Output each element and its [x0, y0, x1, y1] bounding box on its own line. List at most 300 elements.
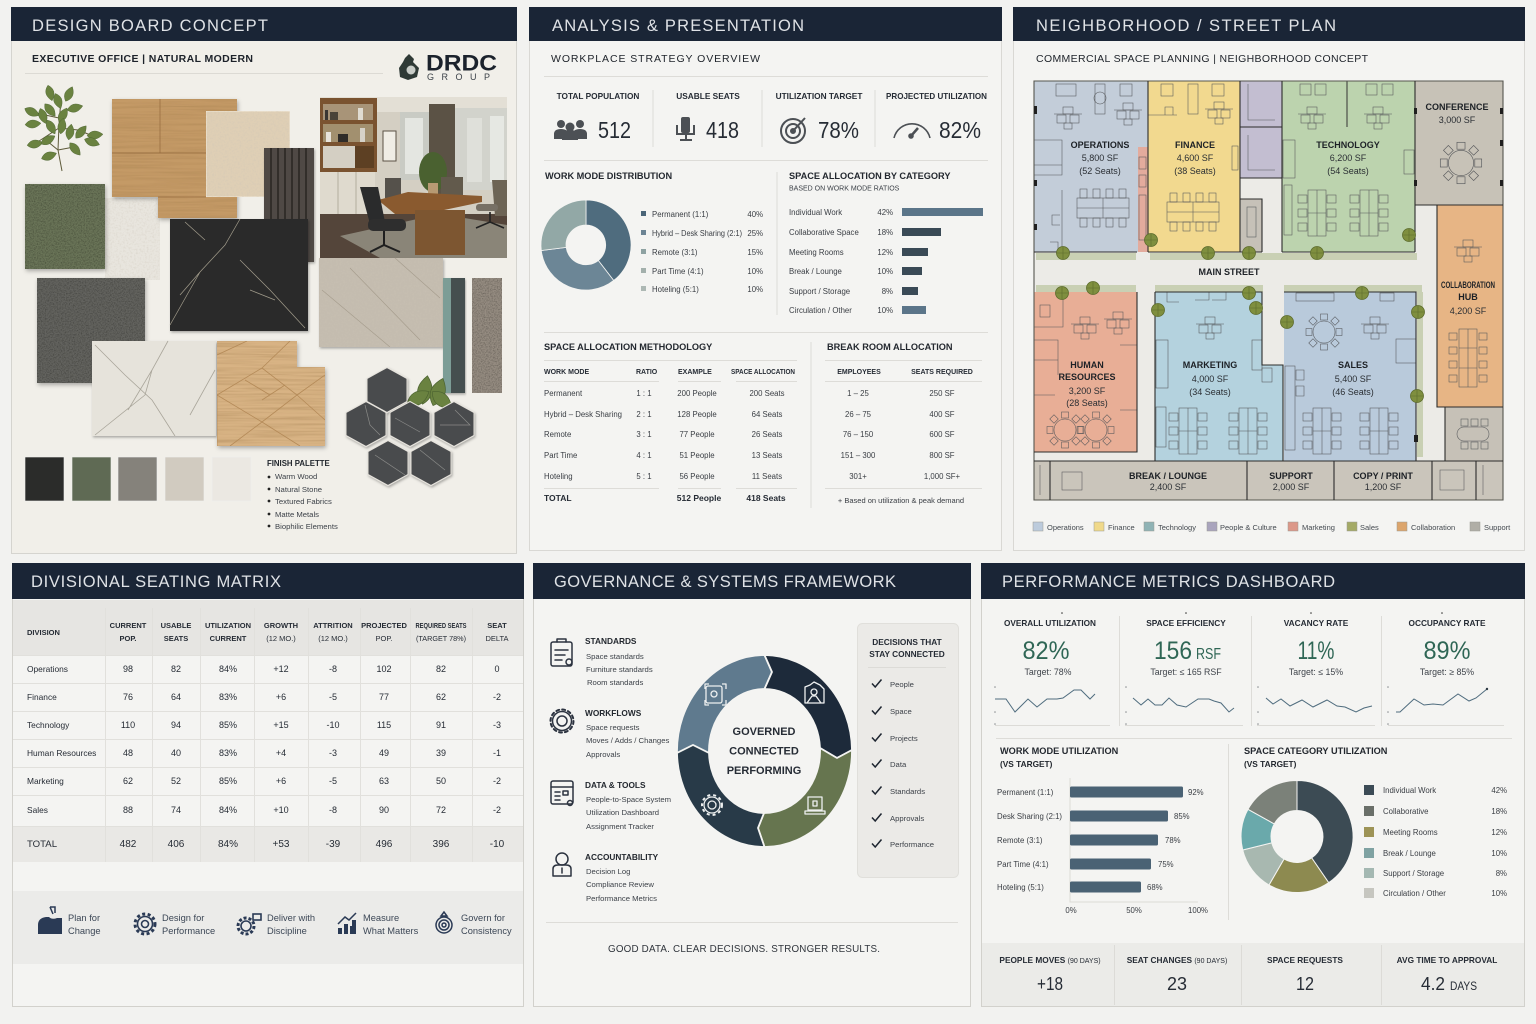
table: space allocation methodology: 77 People [679, 430, 715, 439]
checklist items: Standards [890, 787, 925, 796]
bar chart: space allocation: Collaborative Space [789, 228, 859, 237]
table rows: +12 [273, 664, 289, 674]
heading: work mode utilization [1000, 746, 1119, 769]
bar chart: work mode utilization: Hoteling (5:1) [997, 883, 1044, 892]
table rows: +6 [276, 692, 286, 702]
service band: 1,200 SF [1365, 482, 1402, 492]
metric: avg time to approval [1397, 955, 1497, 994]
center label: PERFORMING [727, 765, 801, 777]
metric: space requests: SPACE REQUESTS [1267, 955, 1343, 965]
table header [27, 621, 509, 643]
table header: CURRENT [210, 634, 247, 643]
room: human resources [1034, 292, 1137, 452]
principle: plan for change: Plan for [68, 913, 100, 923]
table header: ATTRITION [313, 621, 353, 630]
table rows: 83% [219, 692, 237, 702]
material: black marble [170, 219, 308, 331]
table rows: 0 [494, 664, 500, 674]
table: space allocation methodology: SPACE ALLOCATION METHODOLOGY [544, 342, 712, 352]
sparkline [1257, 686, 1375, 726]
pillar: accountability: ACCOUNTABILITY [585, 852, 659, 862]
principle: deliver with discipline: Deliver with [267, 913, 315, 923]
table rows: -1 [493, 748, 501, 758]
totals row: +53 [273, 839, 290, 850]
principle: plan for change [68, 913, 101, 936]
pillar: data and tools: DATA & TOOLS [585, 780, 646, 790]
table: space allocation methodology [544, 342, 797, 503]
room: human resources: RESOURCES [1058, 372, 1116, 382]
sparkline [1125, 686, 1243, 726]
table: space allocation methodology: 56 People [679, 472, 715, 481]
service band: COPY / PRINT [1353, 471, 1413, 481]
legend: space category: 18% [1491, 807, 1507, 816]
principles strip [13, 891, 523, 964]
table: space allocation methodology: 128 People [677, 410, 717, 419]
center label [727, 726, 801, 777]
pillar: data and tools: People-to-Space System [586, 795, 671, 804]
checklist items [872, 680, 934, 849]
KPI: projected utilization: PROJECTED UTILIZATION [886, 91, 987, 101]
table rows: Marketing [27, 776, 64, 786]
KPI: vacancy rate: VACANCY RATE [1284, 618, 1349, 628]
panel title: NEIGHBORHOOD / STREET PLAN [1036, 17, 1336, 35]
material: oak panel [112, 99, 237, 218]
table rows: -10 [326, 720, 340, 730]
checklist panel [858, 624, 958, 878]
room: human resources: HUMAN [1070, 360, 1104, 370]
legend: space category [1364, 785, 1507, 898]
service band: 2,000 SF [1273, 482, 1310, 492]
logo: DRDC [426, 50, 497, 76]
bar chart: work mode utilization: Remote (3:1) [997, 836, 1043, 845]
room: sales [1284, 292, 1416, 461]
room: collaboration hub [1437, 205, 1503, 407]
checklist items: Performance [890, 840, 934, 849]
totals row: 482 [120, 839, 137, 850]
principle: design for performance: Performance [162, 926, 215, 936]
header bar [529, 7, 1002, 41]
KPI: utilization target [776, 91, 862, 143]
panel: performance metrics dashboard [981, 563, 1525, 1006]
pillar: standards: STANDARDS [585, 636, 637, 646]
icon: bar chart trend [338, 913, 356, 934]
table rows: 110 [121, 720, 135, 730]
heading: work mode utilization: (VS TARGET) [1000, 759, 1053, 769]
table rows: Technology [27, 720, 70, 730]
legend: departments: Technology [1158, 523, 1196, 532]
service band [1034, 461, 1503, 500]
room: people and culture [1240, 81, 1282, 252]
checklist items: Approvals [890, 814, 924, 823]
KPI: space efficiency: 156 [1154, 637, 1192, 665]
principle: deliver with discipline [267, 913, 315, 936]
legend: work mode: Hoteling (5:1) [652, 285, 699, 294]
checklist panel: STAY CONNECTED [869, 649, 945, 659]
table rows: 85% [219, 776, 237, 786]
heading: space category utilization: (VS TARGET) [1244, 759, 1297, 769]
table rows: 83% [219, 748, 237, 758]
table rows: 72 [436, 805, 446, 815]
table: space allocation methodology: 13 Seats [752, 451, 782, 460]
bar chart: space allocation [789, 208, 983, 315]
pillar: workflows [550, 708, 669, 759]
icon: laptop [805, 797, 825, 814]
header bar [533, 563, 971, 599]
legend: departments [1033, 522, 1511, 532]
room: operations: 5,800 SF [1082, 153, 1119, 163]
principle: govern for consistency: Govern for [461, 913, 505, 923]
donut chart: space category [1241, 780, 1353, 893]
heading: work mode distribution: WORK MODE DISTRIBUTION [545, 171, 672, 181]
table: space allocation methodology: 1 : 1 [636, 389, 652, 398]
room: conference: CONFERENCE [1425, 102, 1489, 112]
pillar: accountability: Compliance Review [586, 880, 654, 889]
material: plant behind hex tiles [404, 375, 456, 413]
KPI: usable seats: 418 [706, 117, 739, 143]
KPI: space efficiency [1125, 612, 1243, 726]
donut chart: work mode [541, 200, 631, 290]
sparkline [1387, 686, 1504, 726]
material: dark wood slats [264, 148, 314, 262]
totals row: 496 [376, 839, 393, 850]
room: operations: OPERATIONS [1071, 140, 1129, 150]
table rows: 48 [123, 748, 133, 758]
legend: work mode: Remote (3:1) [652, 248, 698, 257]
bar chart: work mode utilization: Permanent (1:1) [997, 788, 1054, 797]
heading: space category utilization [1244, 746, 1388, 769]
center label: CONNECTED [729, 746, 799, 758]
table header: DELTA [485, 634, 509, 643]
room: collaboration hub: HUB [1458, 292, 1478, 302]
legend: space category: Support / Storage [1383, 869, 1444, 878]
table rows: 77 [379, 692, 389, 702]
table rows: 84% [219, 664, 237, 674]
KPI: overall utilization [994, 612, 1110, 726]
logo [399, 50, 497, 82]
table rows: 98 [123, 664, 133, 674]
pillar: accountability: Decision Log [586, 867, 630, 876]
table header: PROJECTED [361, 621, 408, 630]
heading: space allocation by category: BASED ON WORK MODE RATIOS [789, 186, 900, 192]
totals row: -39 [326, 839, 341, 850]
table rows: -5 [329, 776, 337, 786]
table header: CURRENT [110, 621, 147, 630]
header bar [12, 563, 524, 599]
principle: design for performance: Design for [162, 913, 204, 923]
table: space allocation methodology: 51 People [679, 451, 715, 460]
metric: avg time to approval: 4.2 [1421, 973, 1445, 994]
table: space allocation methodology: Permanent [544, 389, 583, 398]
room: technology: (54 Seats) [1327, 166, 1369, 176]
subtitle: COMMERCIAL SPACE PLANNING | NEIGHBORHOOD CONCEPT [1036, 53, 1369, 65]
finish palette swatches [25, 457, 251, 501]
metric: seat changes [1127, 955, 1227, 994]
metric: seat changes: SEAT CHANGES (90 DAYS) [1127, 955, 1227, 965]
bar chart: work mode utilization: 75% [1158, 860, 1174, 869]
room: sales: 5,400 SF [1335, 374, 1372, 384]
room: technology [1282, 81, 1415, 252]
KPI: utilization target: 78% [818, 117, 859, 143]
table rows: 62 [436, 692, 446, 702]
table rows: 40 [171, 748, 181, 758]
heading: space category utilization: SPACE CATEGORY UTILIZATION [1244, 746, 1388, 756]
footer metrics band [982, 943, 1524, 1006]
table rows: 49 [379, 748, 389, 758]
panel title: DESIGN BOARD CONCEPT [32, 17, 268, 35]
table: break room allocation: + Based on utilization & peak demand [838, 496, 964, 505]
subtitle: EXECUTIVE OFFICE | NATURAL MODERN [32, 53, 253, 65]
heading: space allocation by category [789, 171, 950, 192]
cycle diagram [677, 655, 852, 847]
table header: POP. [120, 634, 136, 643]
room: operations [1034, 81, 1148, 252]
room: marketing: (34 Seats) [1189, 387, 1231, 397]
table rows: 82 [436, 664, 446, 674]
bar chart: work mode utilization: Part Time (4:1) [997, 860, 1049, 869]
table: space allocation methodology: TOTAL [544, 493, 572, 503]
bar chart: space allocation: 10% [877, 267, 893, 276]
legend: space category: 10% [1491, 849, 1507, 858]
legend: work mode: 25% [747, 229, 763, 238]
segment: data [758, 748, 852, 847]
bar chart: work mode utilization: 0% [1065, 906, 1077, 915]
legend: work mode: 15% [747, 248, 763, 257]
table: space allocation methodology: 512 People [677, 493, 721, 503]
material: hexagonal stone tiles [346, 368, 474, 486]
KPI: occupancy rate: OCCUPANCY RATE [1409, 618, 1486, 628]
table header: POP. [376, 634, 392, 643]
icon: plan for change [38, 907, 62, 934]
totals row [27, 839, 505, 850]
table: space allocation methodology: 3 : 1 [636, 430, 652, 439]
table header: (12 MO.) [318, 634, 348, 643]
table: space allocation methodology: 2 : 1 [636, 410, 652, 419]
floor plan [1034, 81, 1503, 500]
room: finance: (38 Seats) [1174, 166, 1216, 176]
pillar: standards: Space standards [586, 652, 644, 661]
bar chart: space allocation: 42% [877, 208, 893, 217]
principle: measure what matters: What Matters [363, 926, 419, 936]
photo: executive office [320, 97, 507, 258]
legend: work mode: 10% [747, 267, 763, 276]
table header: (12 MO.) [266, 634, 296, 643]
table rows: 76 [123, 692, 133, 702]
KPI: vacancy rate: 11% [1298, 637, 1334, 665]
table: break room allocation: 800 SF [929, 451, 955, 460]
table rows: 102 [376, 664, 392, 674]
KPI: utilization target: UTILIZATION TARGET [776, 91, 862, 101]
bar chart: work mode utilization: 68% [1147, 883, 1163, 892]
table rows: Sales [27, 805, 48, 815]
KPI: occupancy rate [1387, 612, 1504, 726]
table: break room allocation: EMPLOYEES [837, 369, 881, 376]
room: marketing: 4,000 SF [1192, 374, 1229, 384]
KPI: space efficiency: Target: ≤ 165 RSF [1150, 667, 1222, 677]
bar chart: work mode utilization [997, 778, 1208, 915]
KPI: vacancy rate: Target: ≤ 15% [1289, 667, 1343, 677]
header bar [1013, 7, 1525, 41]
room: human resources: 3,200 SF [1069, 386, 1106, 396]
header bar [11, 7, 517, 41]
bar chart: space allocation: Individual Work [789, 208, 842, 217]
segment: people [764, 655, 852, 758]
room: collaboration hub: COLLABORATION [1441, 280, 1495, 290]
material: cream marble [92, 341, 216, 436]
table rows: 63 [379, 776, 389, 786]
checklist items: Projects [890, 734, 918, 743]
pillar: data and tools: Assignment Tracker [586, 822, 654, 831]
pillar: standards: Furniture standards [586, 665, 653, 674]
room: finance: FINANCE [1175, 140, 1215, 150]
pillar: workflows: WORKFLOWS [585, 708, 642, 718]
bar chart: work mode utilization: 100% [1188, 906, 1208, 915]
icon: standards [705, 684, 726, 705]
table: space allocation methodology: 11 Seats [752, 472, 782, 481]
table rows: 90 [379, 805, 389, 815]
table header: GROWTH [264, 621, 298, 630]
icon: deliver [238, 914, 261, 934]
finish palette list: Textured Fabrics [275, 497, 332, 506]
table rows: Finance [27, 692, 57, 702]
finish palette list: Warm Wood [275, 472, 317, 481]
totals row: 396 [433, 839, 450, 850]
pillar: standards [551, 636, 653, 687]
table: break room allocation: 301+ [849, 472, 867, 481]
panel: governance and systems framework [533, 563, 971, 1006]
table rows: -2 [493, 692, 501, 702]
icon: person [805, 682, 824, 703]
bar chart: space allocation: 12% [877, 248, 893, 257]
room: finance [1148, 81, 1240, 252]
table header: REQUIRED SEATS [416, 623, 467, 630]
table: space allocation methodology: 200 Seats [749, 389, 785, 398]
legend: space category: Circulation / Other [1383, 889, 1446, 898]
legend: space category: Collaborative [1383, 807, 1429, 816]
KPI: overall utilization: Target: 78% [1025, 667, 1072, 677]
table: break room allocation [825, 342, 982, 505]
material: teal strips [443, 278, 465, 393]
table rows: -8 [329, 664, 337, 674]
table: space allocation methodology: 200 People [677, 389, 717, 398]
room: sales: (46 Seats) [1332, 387, 1374, 397]
table: space allocation methodology: Hoteling [544, 472, 573, 481]
KPI: usable seats [676, 91, 740, 143]
table: space allocation methodology: RATIO [636, 369, 658, 376]
table: break room allocation: 400 SF [929, 410, 955, 419]
room: technology: TECHNOLOGY [1316, 140, 1380, 150]
room: technology: 6,200 SF [1330, 153, 1367, 163]
legend: work mode: Permanent (1:1) [652, 210, 709, 219]
legend: work mode: Part Time (4:1) [652, 267, 704, 276]
principle: govern for consistency [461, 913, 512, 936]
KPI: space efficiency: SPACE EFFICIENCY [1146, 618, 1226, 628]
checklist items: People [890, 680, 914, 689]
panel: design board concept [11, 7, 517, 554]
bar chart: work mode utilization: 92% [1188, 788, 1204, 797]
bar chart: space allocation: 10% [877, 306, 893, 315]
walls [1034, 81, 1503, 500]
table header: (TARGET 78%) [416, 634, 466, 643]
bar chart: space allocation: 18% [877, 228, 893, 237]
totals row: TOTAL [27, 839, 58, 850]
table: space allocation methodology: Remote [544, 430, 571, 439]
table rows: +15 [273, 720, 289, 730]
principle: design for performance [162, 913, 215, 936]
metric: space requests: 12 [1296, 973, 1314, 994]
material: green fabric [25, 184, 105, 269]
legend: work mode: Hybrid – Desk Sharing (2:1) [652, 229, 742, 238]
table rows: 85% [219, 720, 237, 730]
legend: departments: Support [1484, 523, 1511, 532]
checklist items: Data [890, 760, 907, 769]
table: break room allocation: 151 – 300 [841, 451, 876, 460]
table: space allocation methodology: 26 Seats [752, 430, 782, 439]
material: taupe stone [319, 258, 443, 347]
pillar: workflows: Approvals [586, 750, 620, 759]
panel: divisional seating matrix [12, 563, 524, 1006]
room: human resources: (28 Seats) [1066, 398, 1108, 408]
material: white boucle [105, 198, 160, 280]
planter strips [1036, 253, 1423, 457]
pillar: workflows: Moves / Adds / Changes [586, 736, 669, 745]
legend: departments: Sales [1360, 523, 1379, 532]
finish palette list: Natural Stone [275, 485, 322, 494]
metric: people moves: +18 [1037, 973, 1063, 994]
sparkline [994, 686, 1110, 726]
principle: measure what matters: Measure [363, 913, 399, 923]
bar chart: space allocation: Support / Storage [789, 287, 850, 296]
heading: space allocation by category: SPACE ALLOCATION BY CATEGORY [789, 171, 950, 181]
table header: SEAT [487, 621, 507, 630]
street label: MAIN STREET [1198, 267, 1260, 277]
principle: plan for change: Change [68, 926, 101, 936]
legend: space category: Meeting Rooms [1383, 828, 1438, 837]
totals row: 406 [168, 839, 185, 850]
table header: SEATS [164, 634, 188, 643]
table rows: +4 [276, 748, 286, 758]
bar chart: work mode utilization: 50% [1126, 906, 1142, 915]
KPI: occupancy rate: Target: ≥ 85% [1420, 667, 1474, 677]
subtitle: WORKPLACE STRATEGY OVERVIEW [551, 53, 760, 65]
legend: departments: Finance [1108, 523, 1135, 532]
table rows: -2 [493, 776, 501, 786]
panel title: GOVERNANCE & SYSTEMS FRAMEWORK [554, 573, 896, 591]
room: conference: 3,000 SF [1439, 115, 1476, 125]
finish palette list: Matte Metals [275, 510, 319, 519]
table rows: Operations [27, 664, 68, 674]
bar chart: work mode utilization: 78% [1165, 836, 1181, 845]
legend: work mode: 40% [747, 210, 763, 219]
KPI: vacancy rate [1257, 612, 1375, 726]
KPI: space efficiency: RSF [1196, 646, 1221, 663]
table rows [27, 664, 501, 815]
table: space allocation methodology: Hybrid – Desk Sharing [544, 410, 622, 419]
matrix table [13, 600, 523, 862]
table: break room allocation: 600 SF [929, 430, 955, 439]
metric: people moves: PEOPLE MOVES (90 DAYS) [999, 955, 1101, 965]
service band: SUPPORT [1269, 471, 1313, 481]
bar chart: space allocation: Meeting Rooms [789, 248, 844, 257]
legend: departments: People & Culture [1220, 523, 1277, 532]
table: space allocation methodology: SPACE ALLOCATION [731, 369, 795, 376]
room: collaboration hub: 4,200 SF [1450, 306, 1487, 316]
material: grey textile strip [472, 278, 502, 393]
legend: space category: Break / Lounge [1383, 849, 1436, 858]
table rows: 50 [436, 776, 446, 786]
icon: gear [135, 914, 155, 934]
pillar: standards: Room standards [587, 678, 644, 687]
metric: seat changes: 23 [1167, 973, 1187, 994]
